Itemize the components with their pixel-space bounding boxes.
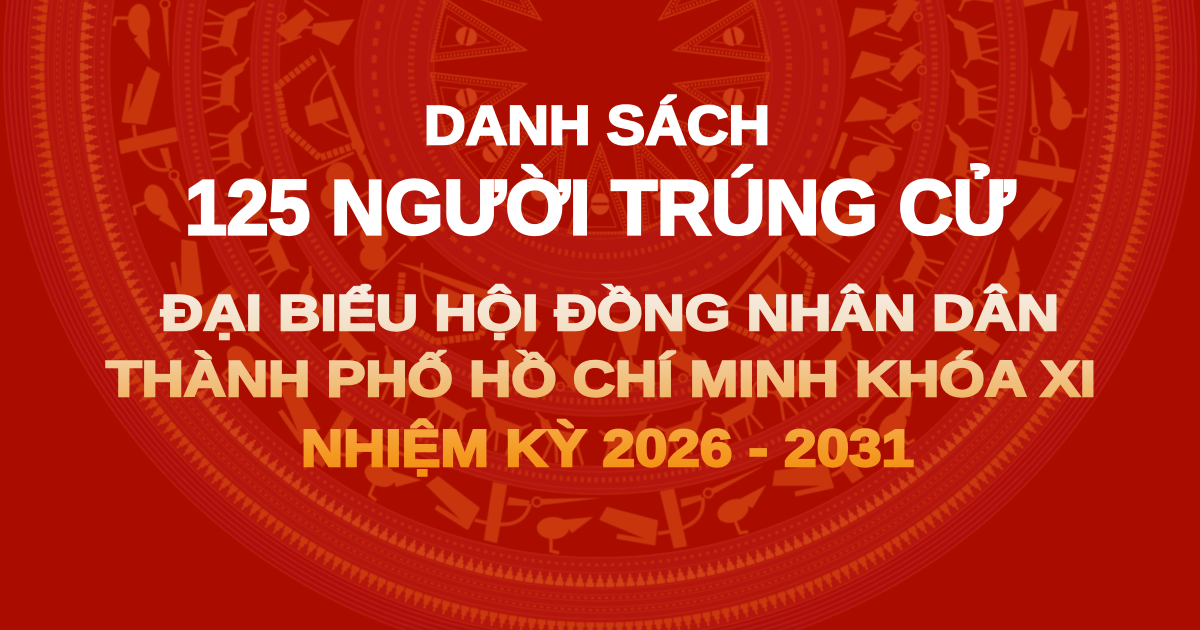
- centre star background: [434, 0, 766, 233]
- figure band background: [317, 0, 883, 350]
- subheading: ĐẠI BIỂU HỘI ĐỒNG NHÂN DÂN: ĐẠI BIỂU HỘI ĐỒNG NHÂN DÂN: [161, 284, 1059, 341]
- houses and dancers band: [273, 0, 926, 394]
- bird band background: [141, 0, 1059, 526]
- fourteen-point star triangles: [431, 0, 769, 233]
- heading: DANH SÁCH: DANH SÁCH: [424, 94, 770, 156]
- flying egrets and ducks band: [84, 0, 1116, 583]
- animal band background: [226, 0, 974, 441]
- deer band: [200, 0, 1000, 467]
- subheading: NHIỆM KỲ 2026 - 2031: NHIỆM KỲ 2026 - 2031: [301, 419, 914, 478]
- heading: 125 NGƯỜI TRÚNG CỬ: 125 NGƯỜI TRÚNG CỬ: [185, 164, 1015, 251]
- subheading: THÀNH PHỐ HỒ CHÍ MINH KHÓA XI: THÀNH PHỐ HỒ CHÍ MINH KHÓA XI: [106, 350, 1096, 407]
